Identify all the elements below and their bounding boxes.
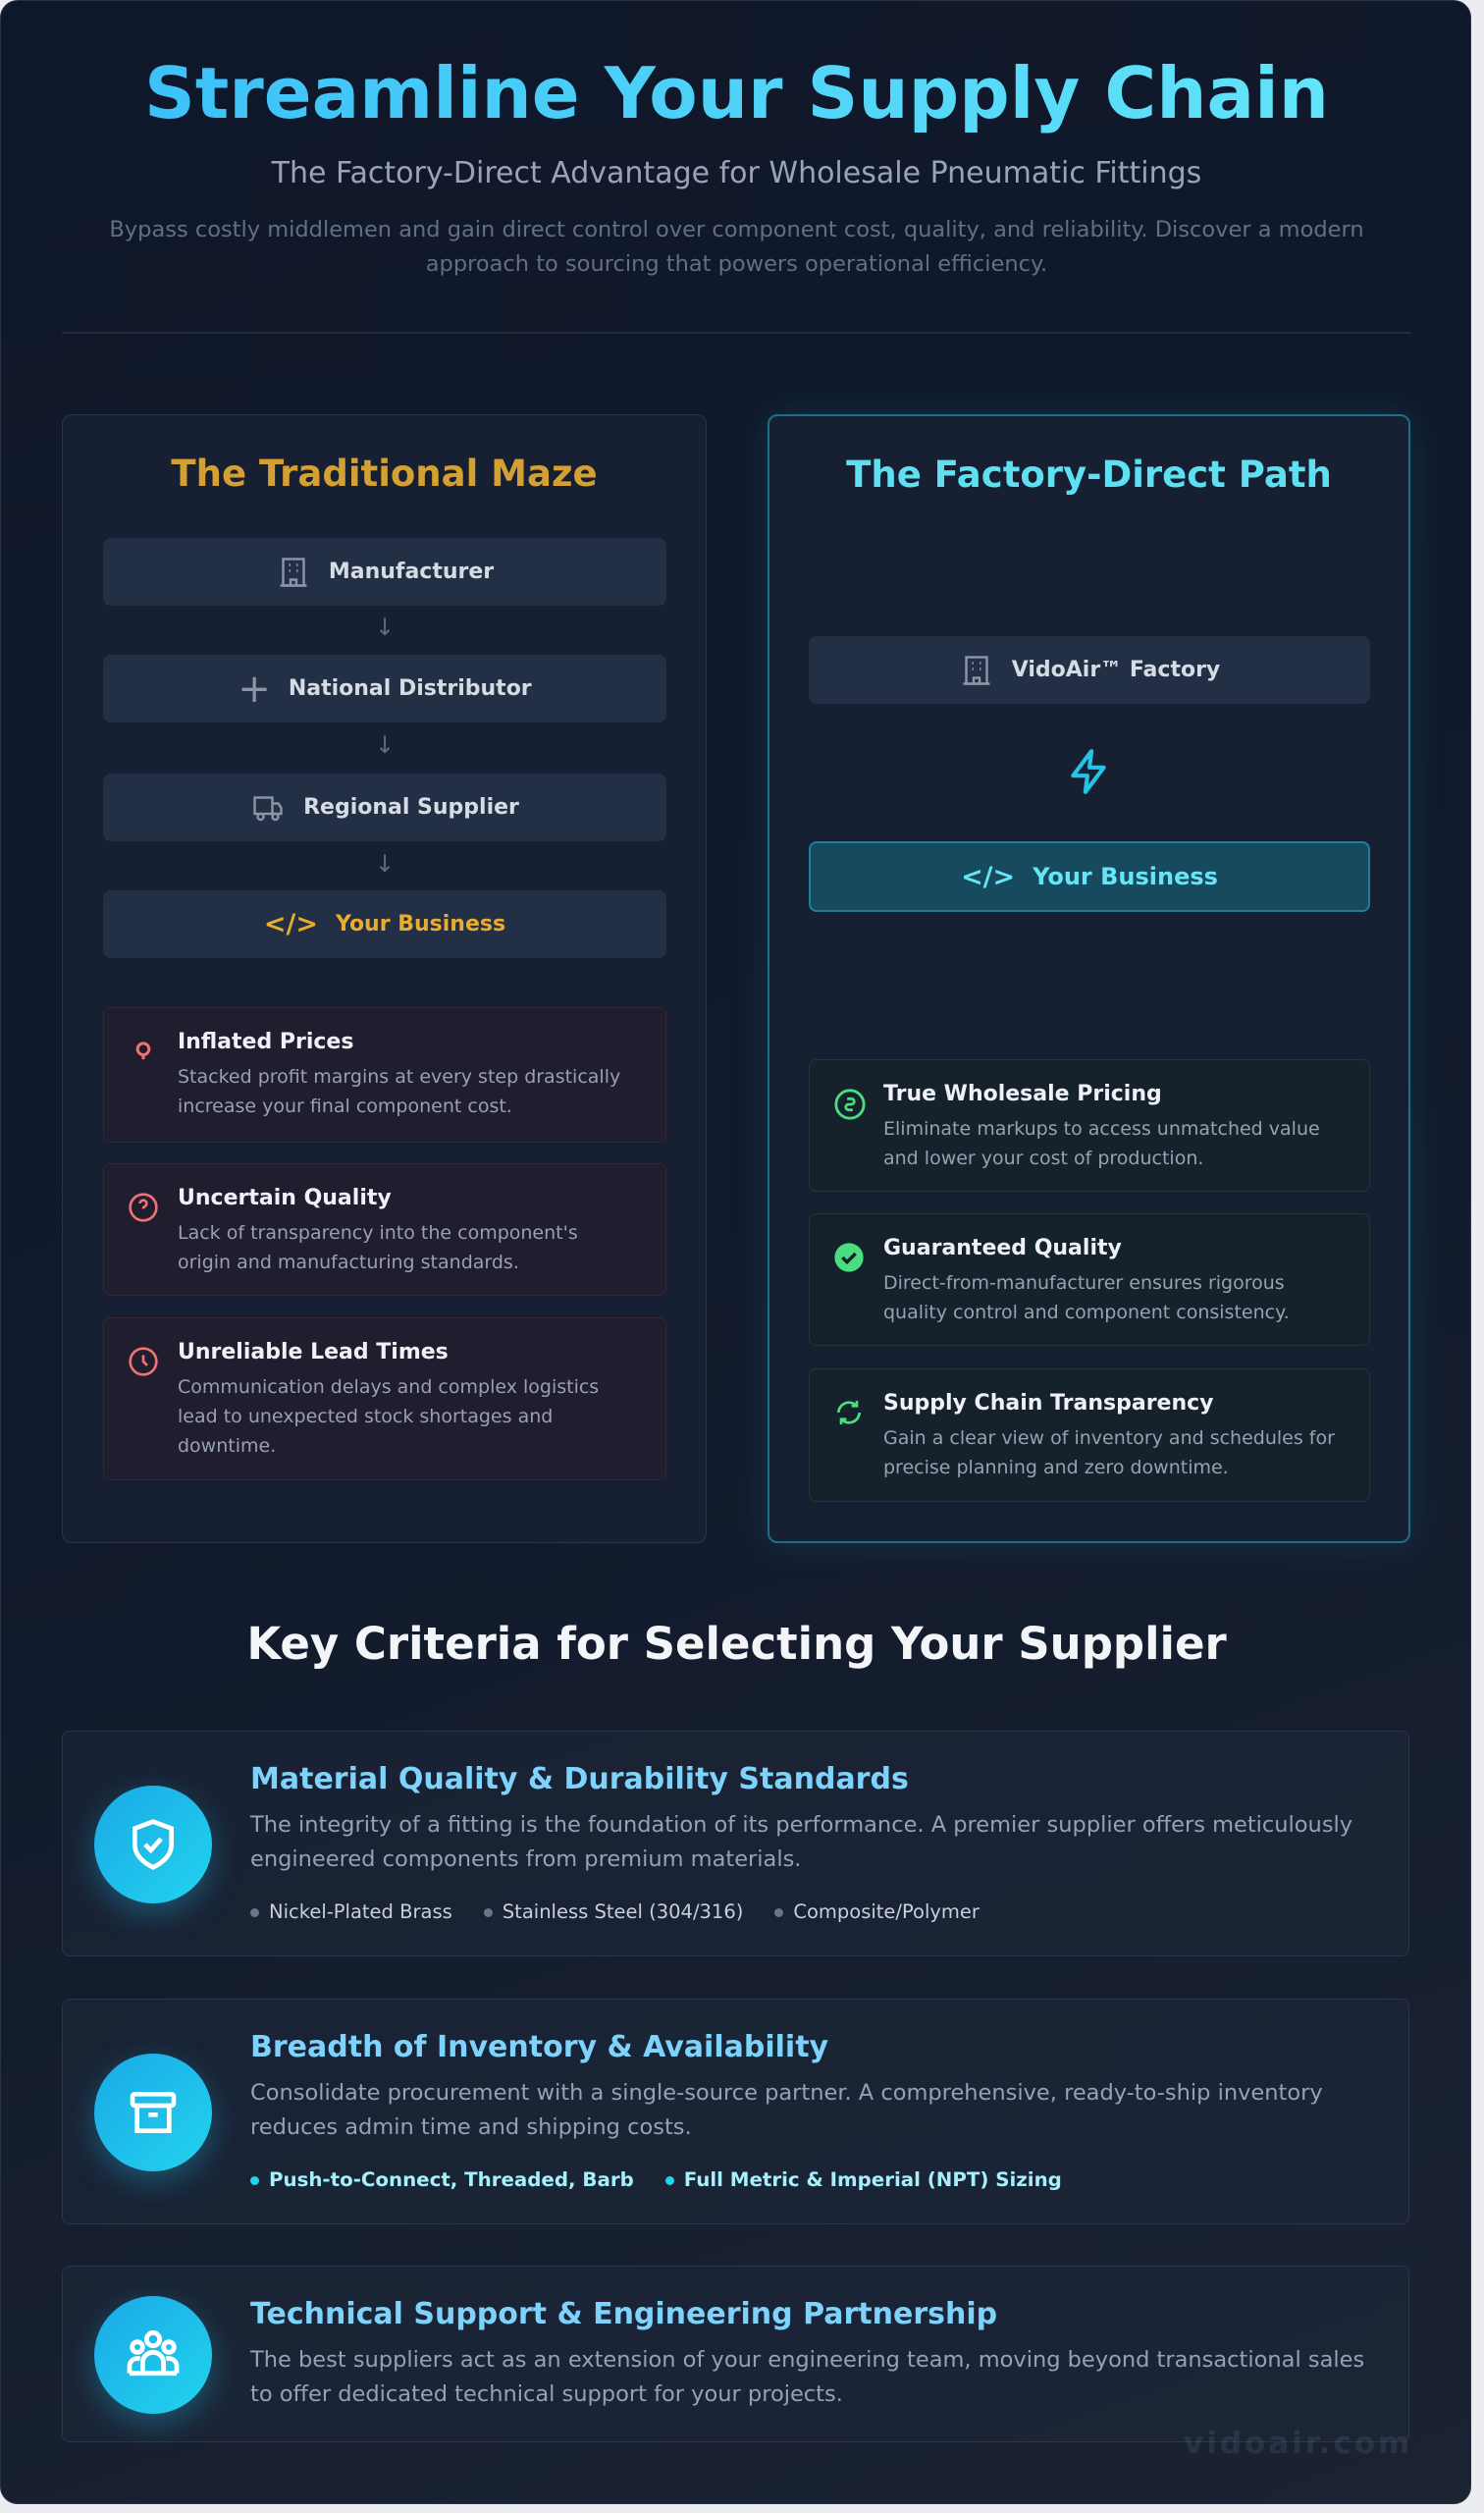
criteria: inventory: Push-to-Connect, Threaded, Barb xyxy=(269,2168,634,2191)
heading: traditional: The Traditional Maze xyxy=(171,453,598,495)
card: true wholesale: True Wholesale Pricing xyxy=(883,1082,1162,1106)
subtitle: The Factory-Direct Advantage for Wholesale Pneumatic Fittings xyxy=(272,156,1201,190)
flow: your business direct: </> xyxy=(961,862,1015,891)
card: true wholesale: Eliminate markups to access unmatched value and lower your cost of production. xyxy=(883,1118,1320,1169)
flow: national distributor xyxy=(103,655,666,722)
flow: manufacturer xyxy=(103,538,666,606)
flow: regional supplier xyxy=(103,774,666,841)
flow: your business xyxy=(103,890,666,958)
criteria: material quality: Composite/Polymer xyxy=(793,1900,980,1923)
criteria: technical support xyxy=(62,2266,1409,2442)
card: guaranteed quality: Guaranteed Quality xyxy=(883,1236,1122,1260)
flow: your business: Your Business xyxy=(336,912,505,936)
panel: factory-direct xyxy=(768,414,1410,1543)
flow: vidoair factory xyxy=(809,636,1370,704)
criteria: technical support: Technical Support & Engineering Partnership xyxy=(250,2297,997,2331)
icon: shield xyxy=(94,1786,212,1903)
card: uncertain quality: Uncertain Quality xyxy=(178,1186,392,1210)
flow: your business direct: Your Business xyxy=(1033,863,1218,890)
card: inflated prices: Inflated Prices xyxy=(178,1030,353,1054)
criteria: inventory: Breadth of Inventory & Availability xyxy=(250,2030,828,2064)
icon: dollar xyxy=(834,1089,866,1120)
card: unreliable lead times xyxy=(103,1317,666,1480)
card: unreliable lead times: Unreliable Lead Times xyxy=(178,1340,449,1364)
icon: question xyxy=(129,1193,158,1222)
title: Streamline Your Supply Chain xyxy=(144,52,1329,134)
criteria: inventory: Consolidate procurement with a single-source partner. A comprehensive, ready-to-ship inventory reduces admin time and shipping costs. xyxy=(250,2080,1323,2140)
icon: check xyxy=(834,1243,864,1272)
flow: national distributor: National Distributor xyxy=(289,676,532,701)
heading: key criteria: Key Criteria for Selecting Your Supplier xyxy=(246,1618,1227,1670)
flow: national distributor: + xyxy=(238,666,271,711)
criteria: material quality: Material Quality & Durability Standards xyxy=(250,1762,909,1796)
criteria: material quality xyxy=(62,1731,1409,1956)
card: uncertain quality xyxy=(103,1163,666,1296)
arrow: ↓ xyxy=(375,731,395,759)
card: inflated prices: Stacked profit margins at every step drastically increase your final component cost. xyxy=(178,1066,620,1117)
card: unreliable lead times: Communication delays and complex logistics lead to unexpected stock shortages and downtime. xyxy=(178,1376,599,1457)
icon: refresh xyxy=(837,1401,861,1424)
card: inflated prices xyxy=(103,1007,666,1143)
flow: manufacturer: Manufacturer xyxy=(329,560,494,584)
arrow: ↓ xyxy=(375,614,395,641)
flow: regional supplier: Regional Supplier xyxy=(303,795,519,820)
card: true wholesale xyxy=(809,1059,1370,1192)
card: transparency: Supply Chain Transparency xyxy=(883,1391,1214,1416)
card: transparency xyxy=(809,1368,1370,1502)
card: transparency: Gain a clear view of inventory and schedules for precise planning and zero downtime. xyxy=(883,1427,1335,1478)
criteria: technical support: The best suppliers act as an extension of your engineering team, moving beyond transactional sales to offer dedicated technical support for your projects. xyxy=(250,2347,1364,2407)
flow: vidoair factory: VidoAir™ Factory xyxy=(1012,658,1220,682)
icon: team xyxy=(94,2296,212,2414)
icon: clock xyxy=(129,1347,158,1376)
criteria: inventory xyxy=(62,1999,1409,2224)
criteria: material quality: Stainless Steel (304/316) xyxy=(503,1900,743,1923)
criteria: material quality: The integrity of a fitting is the foundation of its performance. A premier supplier offers meticulously engineered components from premium materials. xyxy=(250,1812,1352,1872)
icon: archive xyxy=(94,2054,212,2171)
criteria: inventory: Full Metric & Imperial (NPT) Sizing xyxy=(684,2168,1062,2191)
flow: your business direct xyxy=(809,841,1370,912)
card: guaranteed quality xyxy=(809,1213,1370,1346)
heading: factory-direct: The Factory-Direct Path xyxy=(846,454,1332,496)
criteria: material quality: Nickel-Plated Brass xyxy=(269,1900,452,1923)
icon: price xyxy=(135,1042,151,1060)
panel: traditional maze xyxy=(62,414,707,1543)
icon: lightning xyxy=(1071,749,1106,794)
intro text: Bypass costly middlemen and gain direct control over component cost, quality, and reliability. Discover a modern approach to sourcing that powers operational efficiency. xyxy=(109,217,1364,277)
card: uncertain quality: Lack of transparency into the component's origin and manufacturing standards. xyxy=(178,1222,578,1273)
watermark: vidoair.com xyxy=(1184,2426,1413,2461)
arrow: ↓ xyxy=(375,850,395,878)
flow: your business: </> xyxy=(264,909,318,939)
card: guaranteed quality: Direct-from-manufacturer ensures rigorous quality control and component consistency. xyxy=(883,1272,1290,1323)
